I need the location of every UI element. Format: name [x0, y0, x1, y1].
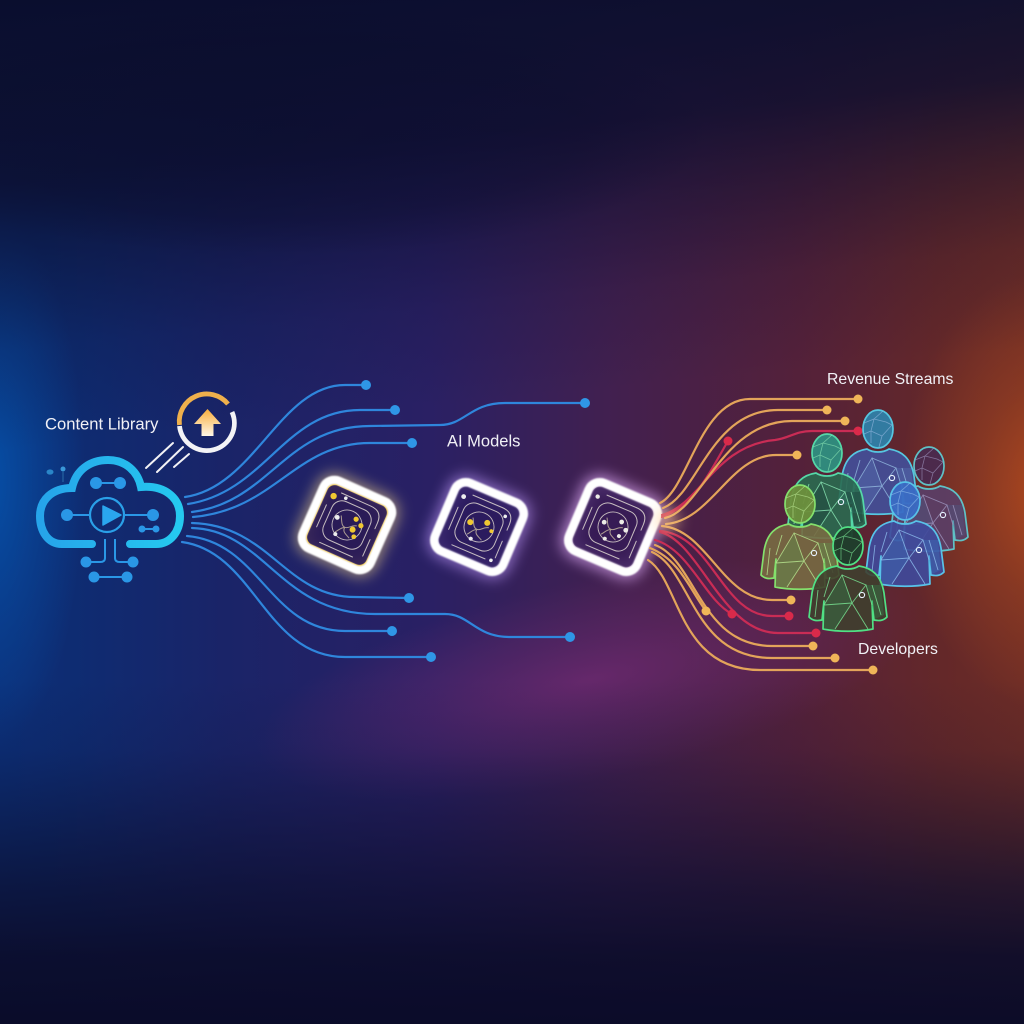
- label: Revenue Streams: Revenue Streams: [827, 371, 954, 388]
- label: Developers: Developers: [858, 641, 938, 658]
- blue data streams from cloud: [182, 380, 590, 662]
- revenue streams: orange and red lines: [648, 394, 878, 674]
- developers: group of low-poly figures: [761, 410, 968, 631]
- figure: blue front right: [866, 482, 944, 586]
- figure: yellow-green left: [761, 485, 839, 589]
- AI chip 3: [564, 478, 662, 576]
- figure: green front: [809, 527, 887, 631]
- figure: dark teal back right: [890, 447, 968, 551]
- AI chip 2: [430, 478, 528, 576]
- AI chip 1: [298, 476, 396, 574]
- title: Content Library: Content Library: [45, 414, 159, 434]
- figure: blue back top: [839, 410, 917, 514]
- icon: upload progress ring: [146, 394, 234, 472]
- figure: teal-green back: [788, 434, 866, 538]
- icon: cloud content library: [40, 460, 180, 582]
- title: AI Models: AI Models: [447, 432, 520, 450]
